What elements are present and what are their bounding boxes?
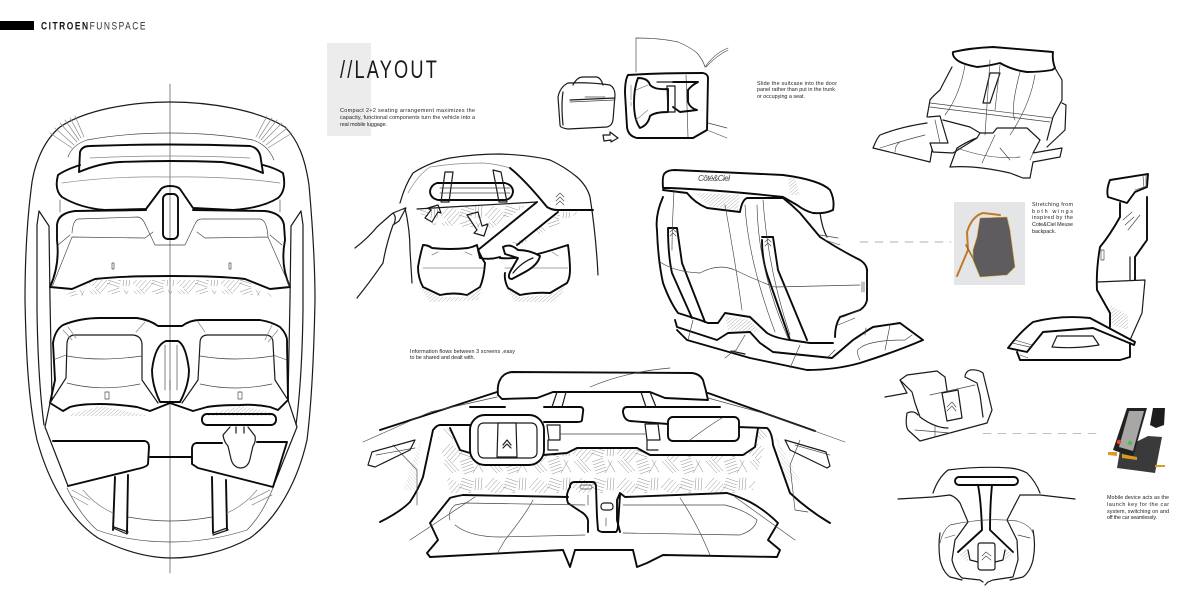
hatched dashboard (437, 428, 768, 493)
upper shelf (79, 144, 263, 173)
backpack note: backpack. (1032, 229, 1056, 235)
right screen (668, 417, 739, 441)
A-pillars (380, 392, 815, 431)
inner cabin sides (380, 425, 830, 523)
photo background (954, 202, 1025, 285)
dock body (1117, 436, 1162, 473)
suitcase and door sketch (558, 38, 728, 142)
dash side contour (45, 400, 297, 487)
layout description: capacity, functional components turn the vehicle into a (340, 115, 475, 121)
screen panels (478, 423, 537, 458)
left cushion (873, 123, 932, 162)
header bar (0, 21, 34, 30)
brand lettering: Côté&Ciel (698, 174, 730, 183)
yoke front sketch (898, 467, 1075, 585)
centre line (169, 84, 171, 573)
arrow up (425, 205, 441, 222)
sun visor left (470, 407, 583, 422)
mirror (498, 372, 708, 400)
roof lines (400, 154, 598, 275)
folded console (928, 116, 977, 153)
control card (942, 390, 962, 421)
seat hatching (418, 285, 568, 302)
bench seat sketch (873, 47, 1066, 178)
hand (355, 208, 406, 298)
rear row seats (50, 318, 288, 411)
suitcase note: Slide the suitcase into the door (757, 81, 837, 87)
arrow (603, 132, 618, 142)
backpack note: Cote&Ciel Meuse (1032, 222, 1073, 228)
backrest (927, 67, 1062, 140)
door panel (625, 73, 708, 138)
layout description: real mobile luggage. (340, 122, 387, 128)
inner shell arcs (67, 488, 273, 542)
seat seams (660, 190, 860, 338)
top seam (663, 190, 867, 337)
phone note: off the car seamlessly. (1107, 515, 1157, 521)
left contour (898, 495, 983, 582)
card logo (947, 402, 956, 411)
dashboard front sketch (363, 368, 845, 567)
phone dock photo (1108, 408, 1165, 473)
front row backrests (50, 210, 290, 289)
door pocket (634, 78, 698, 128)
backpack note: Stretching from (1032, 202, 1074, 208)
door frame (636, 38, 728, 138)
centre console (152, 341, 189, 402)
straps (547, 392, 660, 450)
phone note: system, switching on and (1107, 509, 1169, 515)
screens note: to be shared and dealt with. (410, 355, 475, 361)
T-bar (955, 477, 1018, 485)
left screen (470, 415, 544, 465)
layout heading: //LAYOUT (340, 56, 439, 84)
headrest (663, 170, 834, 213)
layout description: Compact 2+2 seating arrangement maximizes the (340, 108, 475, 114)
cushion block (1097, 257, 1145, 340)
seat contours (410, 497, 795, 555)
backpack note: inspired by the (1032, 215, 1073, 221)
right dash wing (192, 442, 287, 487)
left dash wing (53, 441, 149, 486)
headrest (1107, 174, 1148, 203)
yoke top sketch (885, 370, 992, 441)
straps (957, 213, 1000, 276)
car body outline (25, 102, 315, 558)
car top-view layout sketch (25, 84, 315, 573)
right seat (500, 245, 570, 295)
chevrons (556, 193, 564, 205)
pillar (405, 208, 412, 283)
dashed connector to backpack (860, 241, 951, 243)
call buttons (1117, 440, 1121, 444)
armrest strips (668, 228, 807, 340)
seat outline (427, 487, 780, 567)
phone (1113, 408, 1147, 457)
phone note: launch key for the car (1107, 502, 1169, 508)
Cote et Ciel seat sketch (657, 170, 923, 370)
suitcase (558, 77, 615, 129)
suitcase note: panel rather than put in the trunk (757, 87, 835, 93)
left hub (885, 371, 948, 428)
front headrest wing (57, 165, 284, 210)
backpack photo (954, 202, 1025, 285)
side seat sketch (1008, 174, 1148, 360)
sun visor right (623, 407, 720, 424)
key device (503, 246, 540, 279)
wheel rim (940, 520, 1033, 543)
centre slot (163, 194, 178, 239)
cabin band (478, 168, 593, 259)
door strips (37, 211, 303, 425)
bag (973, 217, 1015, 277)
centre legs (113, 475, 227, 533)
right contour (985, 495, 1075, 585)
backpack note: both wings (1032, 209, 1073, 215)
lower hatch (68, 406, 275, 416)
left seat (418, 245, 485, 295)
yellow feet (1108, 452, 1165, 467)
base slot (1052, 336, 1099, 348)
lower dash edge (450, 428, 758, 455)
steering stalk (223, 427, 255, 468)
side pods (968, 550, 1005, 562)
card logo (982, 552, 991, 560)
watch (1150, 408, 1165, 428)
back (1097, 197, 1147, 327)
headrest (953, 47, 1055, 72)
stem (958, 485, 1013, 552)
dashed connector to phone (983, 432, 1097, 434)
hatching (695, 178, 800, 332)
windscreen arc and inner shell (60, 133, 280, 212)
right cushion (950, 128, 1040, 167)
base (1008, 317, 1135, 352)
title: CitroenFunspace: CITROENFUNSPACE (41, 20, 147, 32)
arrow down (467, 212, 488, 236)
steering pill (202, 414, 276, 425)
dash centre bar (150, 456, 192, 458)
layout panel background (327, 43, 371, 136)
suitcase note: or occupying a seat. (757, 94, 805, 100)
side panel (1047, 103, 1066, 147)
corner vents (50, 116, 292, 148)
yoke loop (906, 370, 992, 441)
rear seats interaction sketch (355, 154, 598, 302)
centre console (570, 482, 620, 532)
phone note: Mobile device acts as the (1107, 495, 1169, 501)
seat base (675, 320, 923, 370)
screens note: Information flows between 3 screens ,easy (410, 349, 515, 355)
control card (978, 543, 995, 570)
centre slot (983, 73, 1000, 103)
seat seams (930, 60, 1052, 163)
floor hatching (62, 280, 275, 297)
hood arc (933, 467, 1040, 493)
luggage with straps (430, 183, 513, 200)
hatched back panel (418, 203, 580, 245)
chevrons on screen (503, 440, 511, 448)
seat body (657, 197, 833, 343)
